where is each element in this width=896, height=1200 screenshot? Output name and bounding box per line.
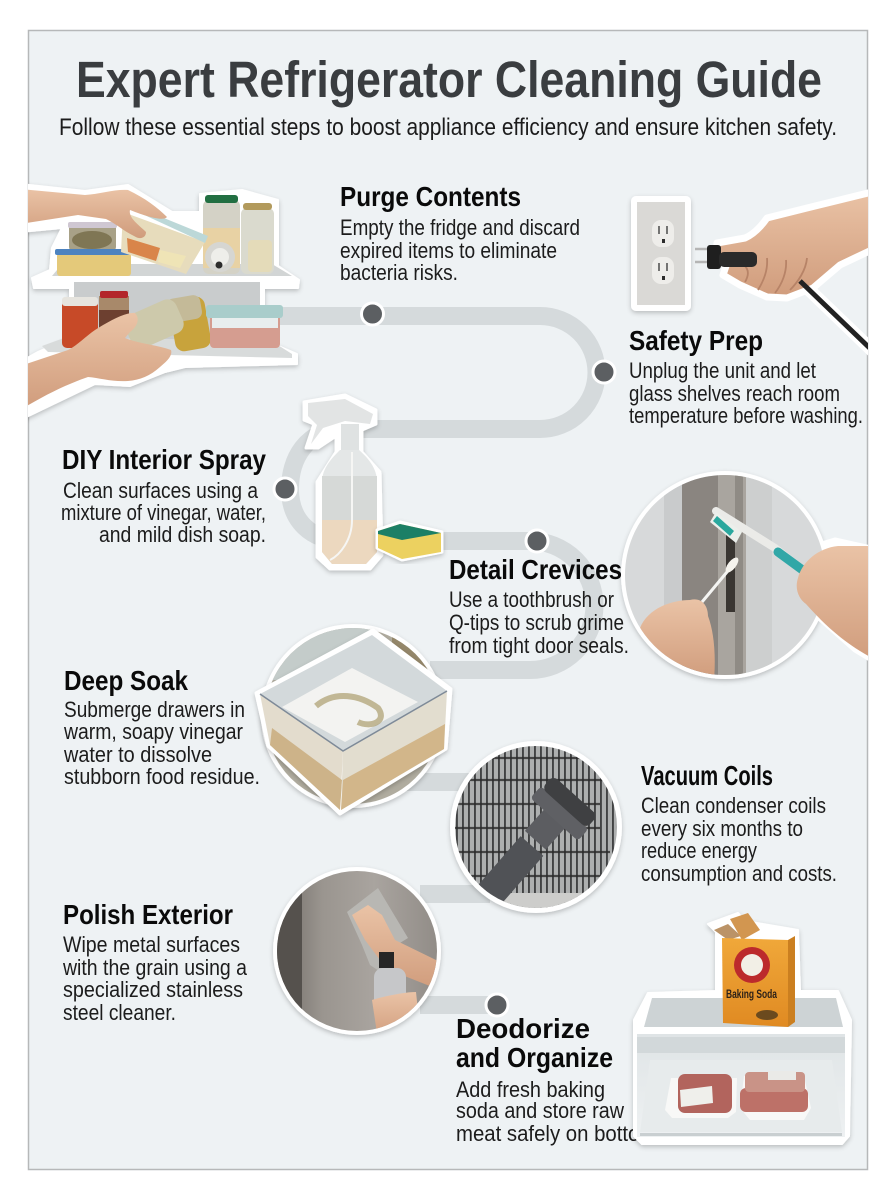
body: Polish Exterior: Wipe metal surfaces <box>63 932 240 957</box>
body: Safety Prep: glass shelves reach room <box>629 381 840 406</box>
illustration: wall outlet and unplugging hand <box>631 190 880 358</box>
vacuum hose <box>478 846 532 908</box>
body: Polish Exterior: specialized stainless <box>63 977 243 1002</box>
body: Vacuum Coils <box>641 793 837 886</box>
body: Purge Contents: bacteria risks. <box>340 260 458 285</box>
heading: Deodorize and Organize: Deodorize <box>456 1013 590 1044</box>
hand: left <box>640 599 715 680</box>
hand holding bottle <box>372 992 418 1029</box>
hand: bottom <box>20 313 171 410</box>
body: Detail Crevices: Q-tips to scrub grime <box>449 610 624 635</box>
dust tuft <box>585 826 586 827</box>
illustration: vacuum on condenser coils <box>450 740 622 915</box>
body: Purge Contents: Empty the fridge and discard <box>340 215 580 240</box>
sponge <box>377 522 442 560</box>
cleaner bottle <box>374 968 406 1000</box>
body: Deep Soak: warm, soapy vinegar <box>63 719 243 744</box>
bottle <box>322 450 377 564</box>
body: Deep Soak: water to dissolve <box>63 742 212 767</box>
body: Deodorize and Organize: meat safely on bottom. <box>456 1121 662 1146</box>
body: Deep Soak: Submerge drawers in <box>64 697 245 722</box>
body: Vacuum Coils: Clean condenser coils <box>641 793 826 818</box>
body: Vacuum Coils: consumption and costs. <box>641 861 837 886</box>
body: DIY Interior Spray: Clean surfaces using a <box>63 478 259 503</box>
cloth <box>347 888 408 975</box>
body: Vacuum Coils: every six months to <box>641 816 803 841</box>
heading: Deodorize and Organize <box>456 1013 613 1073</box>
hand: top <box>20 189 167 238</box>
body: Safety Prep <box>629 358 863 428</box>
body: Detail Crevices <box>449 587 629 658</box>
body: Deodorize and Organize: Add fresh baking <box>456 1077 605 1102</box>
body: Deep Soak: stubborn food residue. <box>64 764 260 789</box>
illustration: toothbrush and q-tip on door seal <box>620 470 880 680</box>
food: tilted container <box>121 214 208 274</box>
plug <box>695 245 757 269</box>
hand wiping <box>352 905 440 990</box>
body: Polish Exterior: with the grain using a <box>62 955 248 980</box>
baking soda box: Baking Soda <box>726 987 777 1001</box>
step marker dots <box>274 303 615 1016</box>
baking soda box <box>714 913 795 1027</box>
food: blue lid container <box>55 249 131 276</box>
body: DIY Interior Spray: and mild dish soap. <box>99 522 266 547</box>
food: red jars bottom shelf <box>62 291 129 348</box>
body: Purge Contents <box>340 215 580 285</box>
body: Deep Soak <box>63 697 260 789</box>
body: DIY Interior Spray: mixture of vinegar, water, <box>61 500 266 525</box>
body: Vacuum Coils: reduce energy <box>641 838 757 863</box>
heading: Safety Prep: Safety Prep <box>629 325 763 356</box>
heading: Deep Soak: Deep Soak <box>64 665 188 696</box>
body: Polish Exterior: steel cleaner. <box>63 1000 176 1025</box>
hand <box>716 190 880 298</box>
cord outline <box>805 289 868 356</box>
nozzle <box>525 778 594 850</box>
food: jars top shelf <box>203 195 274 274</box>
food: small purple container <box>68 222 117 251</box>
spray head <box>308 399 373 452</box>
food: yellow jar and held jar <box>128 295 210 352</box>
illustration: soaking crisper drawer <box>256 620 452 814</box>
heading: Deodorize and Organize: and Organize <box>456 1042 613 1073</box>
heading: DIY Interior Spray: DIY Interior Spray <box>62 444 266 475</box>
body: Deodorize and Organize <box>456 1077 662 1146</box>
process path connector <box>280 316 596 1005</box>
body: Polish Exterior <box>62 932 248 1025</box>
body: DIY Interior Spray <box>61 478 266 547</box>
toothbrush <box>710 511 808 574</box>
heading: Polish Exterior: Polish Exterior <box>63 899 233 930</box>
heading: Purge Contents: Purge Contents <box>340 181 521 212</box>
body: Deodorize and Organize: soda and store raw <box>456 1098 624 1123</box>
body: Detail Crevices: from tight door seals. <box>449 633 629 658</box>
illustration: baking soda and clear bin with meat <box>634 913 851 1144</box>
illustration: fridge shelves with hands <box>20 184 299 420</box>
heading: Detail Crevices: Detail Crevices <box>449 554 622 585</box>
body: Purge Contents: expired items to eliminate <box>340 238 557 263</box>
body: Safety Prep: Unplug the unit and let <box>629 358 816 383</box>
food: meat container <box>206 305 283 348</box>
clear bin <box>637 998 845 1137</box>
q-tip <box>702 555 741 602</box>
body: Detail Crevices: Use a toothbrush or <box>449 587 614 612</box>
meat trays <box>665 1071 811 1120</box>
cord <box>798 279 868 350</box>
illustration: spray bottle and sponge <box>304 395 442 569</box>
hand: right <box>796 546 868 656</box>
outlets <box>652 220 674 284</box>
heading: Vacuum Coils: Vacuum Coils <box>641 760 773 791</box>
illustration: polishing stainless steel exterior <box>270 866 444 1040</box>
